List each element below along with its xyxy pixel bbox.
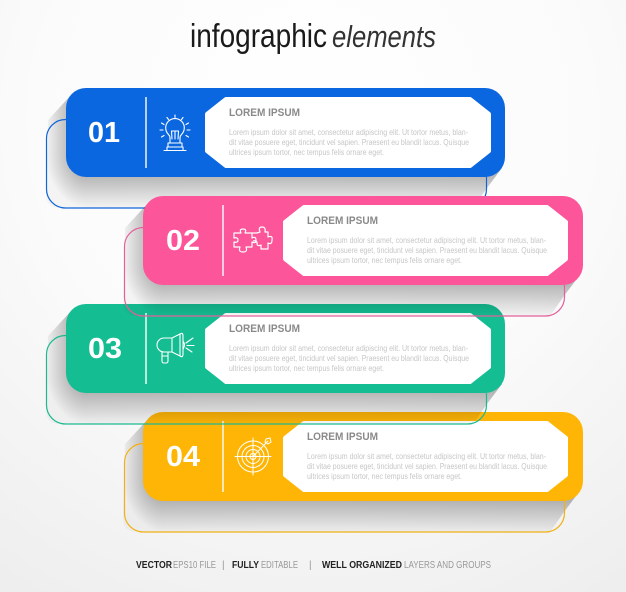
outline 03 bbox=[46, 336, 486, 424]
body text 03: dit vitae posuere eget, tincidunt vel sapien. Praesent eu blandit lacus. Quisque bbox=[229, 353, 469, 363]
text panel 01 bbox=[207, 99, 489, 166]
card 04 bbox=[143, 412, 583, 501]
panel: step 01 bbox=[46, 88, 508, 208]
outline 01 bbox=[46, 120, 486, 208]
card shadow 01 bbox=[46, 88, 508, 208]
body text 01: Lorem ipsum dolor sit amet, consectetur adipiscing elit. Ut tortor metus, blan- bbox=[229, 127, 468, 137]
body text 02 bbox=[307, 235, 547, 265]
card 01 bbox=[66, 88, 505, 177]
body text 01: dit vitae posuere eget, tincidunt vel sapien. Praesent eu blandit lacus. Quisque bbox=[229, 137, 469, 147]
footer tagline: | bbox=[222, 560, 225, 571]
body text 04: Lorem ipsum dolor sit amet, consectetur adipiscing elit. Ut tortor metus, blan- bbox=[307, 451, 546, 461]
footer tagline: FULLY bbox=[232, 560, 259, 571]
card shadow 04 bbox=[123, 412, 585, 532]
number 03: 03 bbox=[88, 333, 122, 365]
body text 03: ultrices ipsum tortor, nec tempus felis ornare eget. bbox=[229, 363, 384, 373]
divider 03 bbox=[145, 313, 147, 384]
text panel 02 bbox=[285, 207, 566, 274]
body text 04: ultrices ipsum tortor, nec tempus felis ornare eget. bbox=[307, 471, 462, 481]
body text 03: Lorem ipsum dolor sit amet, consectetur adipiscing elit. Ut tortor metus, blan- bbox=[229, 343, 468, 353]
body text 01 bbox=[229, 127, 469, 157]
title: infographic bbox=[190, 17, 327, 54]
icon: megaphone bbox=[157, 333, 194, 363]
heading 04: LOREM IPSUM bbox=[307, 431, 378, 443]
footer tagline: EDITABLE bbox=[261, 560, 298, 571]
body text 04 bbox=[307, 451, 547, 481]
number 02: 02 bbox=[166, 225, 200, 257]
card shadow 03 bbox=[46, 304, 508, 424]
footer tagline bbox=[136, 560, 491, 571]
text panel 04 bbox=[285, 423, 566, 490]
outline 02 bbox=[124, 228, 564, 316]
heading 02: LOREM IPSUM bbox=[307, 215, 378, 227]
footer tagline: LAYERS AND GROUPS bbox=[404, 560, 491, 571]
panel: step 04 bbox=[123, 412, 585, 532]
icon: puzzle bbox=[234, 227, 272, 252]
body text 03 bbox=[229, 343, 469, 373]
number 01: 01 bbox=[88, 117, 120, 149]
panel: step 02 bbox=[123, 196, 585, 316]
heading 01: LOREM IPSUM bbox=[229, 107, 300, 119]
divider 02 bbox=[222, 205, 224, 276]
title bbox=[190, 17, 436, 54]
divider 04 bbox=[222, 421, 224, 492]
footer tagline: VECTOR bbox=[136, 560, 173, 571]
body text 01: ultrices ipsum tortor, nec tempus felis ornare eget. bbox=[229, 147, 384, 157]
card shadow 02 bbox=[123, 196, 585, 316]
footer tagline: EPS10 FILE bbox=[173, 560, 216, 571]
icon: target bbox=[235, 438, 271, 475]
card 03 bbox=[66, 304, 505, 393]
divider 01 bbox=[145, 97, 147, 168]
icon: light bulb bbox=[160, 115, 190, 150]
body text 02: Lorem ipsum dolor sit amet, consectetur adipiscing elit. Ut tortor metus, blan- bbox=[307, 235, 546, 245]
title: elements bbox=[332, 19, 436, 54]
footer tagline: WELL ORGANIZED bbox=[322, 560, 402, 571]
card 02 bbox=[143, 196, 583, 285]
outline 04 bbox=[124, 444, 564, 532]
body text 04: dit vitae posuere eget, tincidunt vel sapien. Praesent eu blandit lacus. Quisque bbox=[307, 461, 547, 471]
number 04: 04 bbox=[166, 441, 200, 473]
footer tagline: | bbox=[309, 560, 312, 571]
panel: step 03 bbox=[46, 304, 508, 424]
text panel 03 bbox=[207, 315, 489, 382]
heading 03: LOREM IPSUM bbox=[229, 323, 300, 335]
body text 02: dit vitae posuere eget, tincidunt vel sapien. Praesent eu blandit lacus. Quisque bbox=[307, 245, 547, 255]
body text 02: ultrices ipsum tortor, nec tempus felis ornare eget. bbox=[307, 255, 462, 265]
